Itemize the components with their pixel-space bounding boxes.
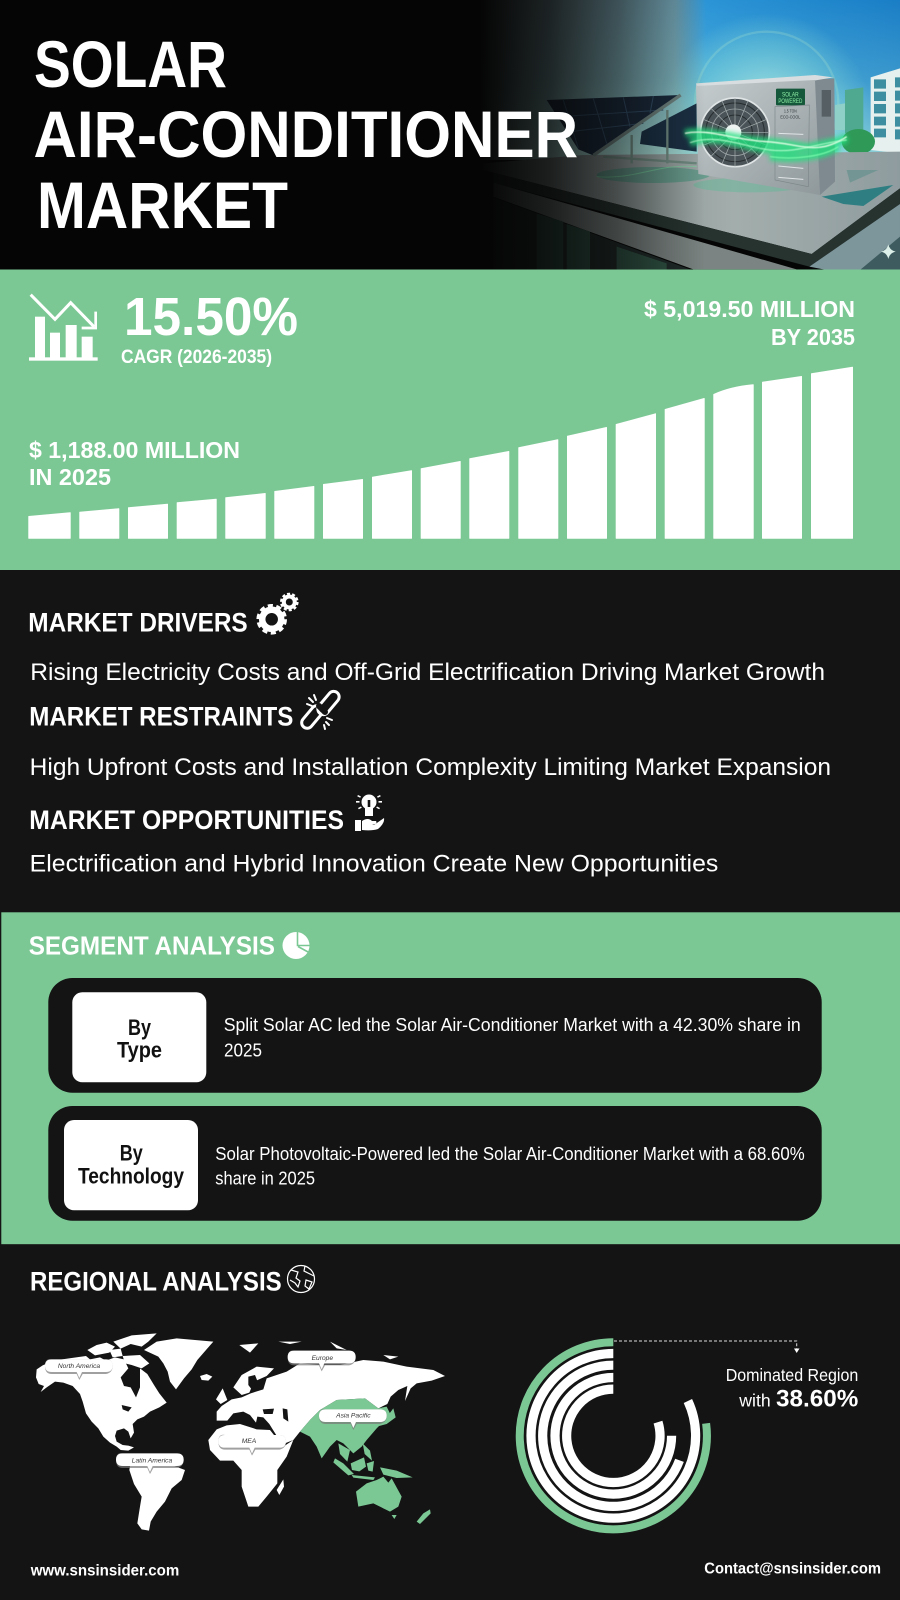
AC outdoor unit — [696, 75, 835, 195]
world map — [36, 1333, 445, 1531]
2035 value label: $ 5,019.50 MILLION — [644, 296, 855, 322]
callout: dominated region: with — [738, 1391, 771, 1411]
label: MEA: MEA — [242, 1438, 257, 1445]
label: Latin America: Latin America — [132, 1458, 173, 1465]
heading: segment analysis: SEGMENT ANALYSIS — [29, 930, 275, 960]
icon: globe — [288, 1266, 314, 1292]
label: North America: North America — [58, 1363, 100, 1370]
CAGR value: 15.50% — [124, 287, 298, 347]
label: MEA — [218, 1435, 286, 1456]
card: by technology: By — [120, 1140, 143, 1165]
label: Asia Pacific — [319, 1409, 387, 1430]
heading: market drivers: MARKET DRIVERS — [28, 608, 248, 638]
card: by type: 2025 — [224, 1041, 262, 1061]
label: Asia Pacific: Asia Pacific — [335, 1413, 371, 1420]
card: by type: Split Solar AC led the Solar Air-Conditioner Market with a 42.30% share in — [224, 1015, 801, 1035]
title: AIR-CONDITIONER — [34, 97, 578, 171]
header banner — [0, 0, 900, 270]
footer: website: www.snsinsider.com — [30, 1563, 179, 1580]
energy swirl — [597, 132, 847, 177]
opportunity text: Electrification and Hybrid Innovation Create New Opportunities — [30, 851, 718, 878]
map: Asia Pacific highlighted — [300, 1398, 431, 1524]
panel: segment analysis — [1, 912, 900, 1244]
label: North America — [45, 1359, 113, 1380]
CAGR caption: CAGR (2026-2035) — [121, 347, 272, 368]
callout: dominated region — [726, 1365, 858, 1413]
footer: contact email: Contact@snsinsider.com — [704, 1560, 881, 1577]
AC outdoor unit: 1.5 TON — [784, 109, 797, 115]
AC outdoor unit: POWERED — [778, 98, 802, 105]
2025 value label: $ 1,188.00 MILLION — [29, 437, 240, 463]
arrow: dashed leader line — [614, 1341, 800, 1353]
AC outdoor unit: ECO-COOL — [780, 114, 800, 120]
map: rest of world — [36, 1333, 445, 1531]
heading: market restraints: MARKET RESTRAINTS — [29, 702, 293, 732]
heading: market opportunities: MARKET OPPORTUNITIES — [29, 805, 344, 835]
callout: dominated region: Dominated Region — [726, 1365, 858, 1385]
driver text: Rising Electricity Costs and Off-Grid Electrification Driving Market Growth — [30, 659, 825, 686]
callout: dominated region: 38.60% — [776, 1386, 858, 1413]
card: by type: Type — [117, 1037, 162, 1062]
2025 value label: IN 2025 — [29, 464, 111, 490]
card: by technology — [48, 1106, 822, 1221]
card: by technology: share in 2025 — [215, 1168, 315, 1188]
panel: market dynamics — [0, 570, 900, 912]
title: SOLAR — [34, 27, 227, 101]
icon: falling chart — [29, 295, 98, 361]
heading: regional analysis: REGIONAL ANALYSIS — [30, 1267, 282, 1297]
restraint text: High Upfront Costs and Installation Complexity Limiting Market Expansion — [30, 754, 831, 781]
2035 value label: BY 2035 — [771, 324, 855, 350]
2035 value label — [644, 296, 855, 350]
card: by technology: Technology — [78, 1163, 185, 1188]
radial chart: regional share — [520, 1342, 707, 1529]
icon: gears — [258, 594, 297, 633]
card: by type: By — [128, 1015, 152, 1040]
icon: sparkle watermark — [881, 244, 896, 259]
card: by type — [48, 978, 822, 1093]
icon: broken chain link — [299, 689, 341, 730]
2025 value label — [29, 437, 240, 490]
title: MARKET — [37, 168, 288, 242]
AC outdoor unit: SOLAR — [782, 91, 799, 98]
icon: lightbulb in hand — [355, 794, 384, 831]
bar chart: market growth — [29, 367, 853, 538]
label: Europe: Europe — [312, 1355, 333, 1362]
card: by technology: Solar Photovoltaic-Powered led the Solar Air-Conditioner Market with a 68.60% — [215, 1144, 805, 1164]
panel: regional analysis — [0, 1244, 900, 1600]
label: Europe — [288, 1350, 356, 1371]
icon: pie chart — [282, 932, 310, 959]
label: Latin America — [116, 1453, 184, 1474]
panel: market size and CAGR — [0, 270, 900, 570]
header photo: rooftop AC unit with solar panels — [450, 0, 900, 270]
title — [34, 27, 578, 242]
